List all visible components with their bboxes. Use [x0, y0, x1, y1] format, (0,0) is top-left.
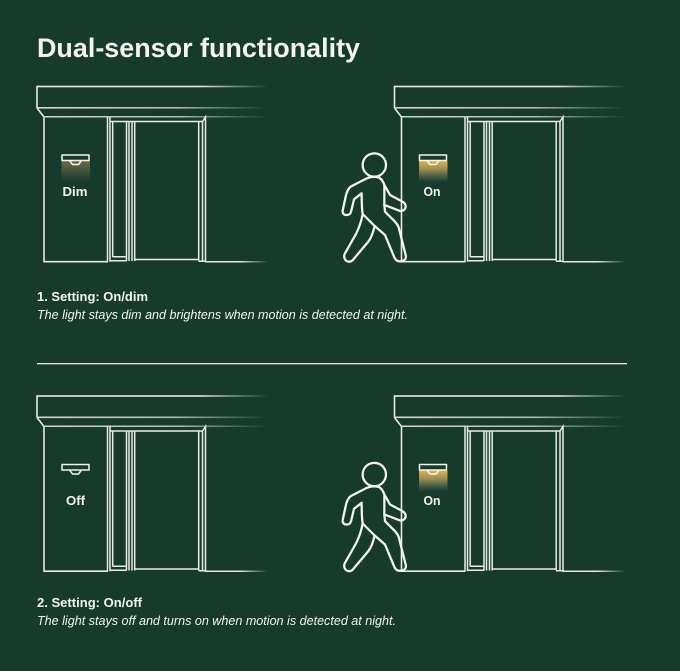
title: Dual-sensor functionality [37, 33, 360, 63]
label: Dim: Dim [62, 185, 88, 199]
panel: on/off setting, motion detected [343, 395, 626, 572]
icon: bright wall light [419, 155, 448, 182]
icon: dim wall light [62, 155, 90, 182]
label: Off: Off [66, 494, 86, 508]
panel: on/dim setting, motion detected [343, 86, 626, 262]
icon: wall light off [62, 464, 89, 474]
label: On: On [424, 185, 440, 199]
label: On: On [424, 494, 440, 508]
storefront line drawing [37, 395, 268, 572]
storefront line drawing [394, 86, 626, 262]
panel: on/off setting, no motion [37, 395, 268, 572]
description: setting 2: The light stays off and turns on when motion is detected at night. [37, 614, 396, 628]
icon: walking person [343, 463, 406, 571]
heading: setting 1: 1. Setting: On/dim [37, 290, 148, 304]
description: setting 1: The light stays dim and brightens when motion is detected at night. [37, 308, 408, 322]
heading: setting 2: 2. Setting: On/off [37, 596, 143, 610]
panel: on/dim setting, no motion [37, 86, 268, 262]
icon: bright wall light [419, 464, 448, 492]
storefront line drawing [394, 395, 626, 572]
icon: walking person [343, 153, 406, 262]
storefront line drawing [37, 86, 268, 262]
